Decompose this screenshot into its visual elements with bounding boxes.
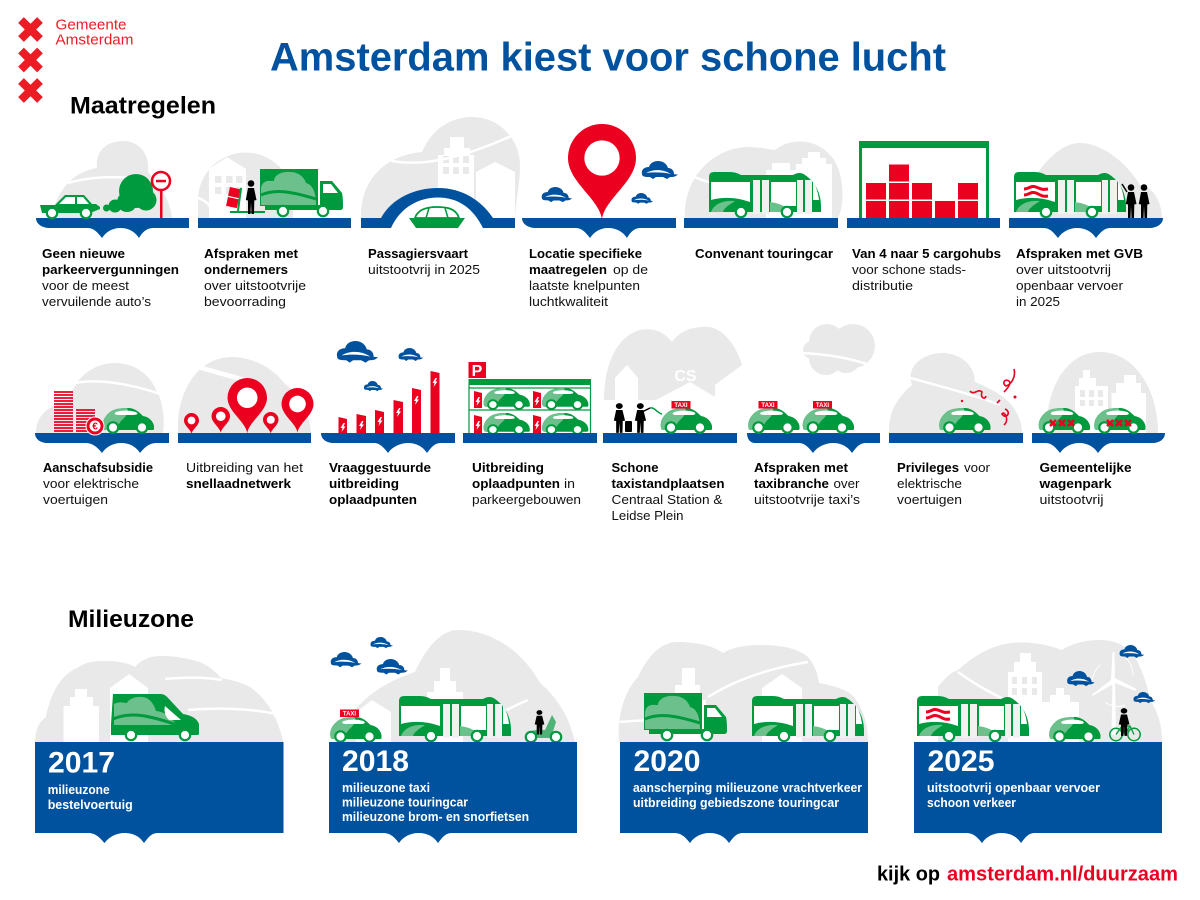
text block: voor de meest — [42, 278, 129, 293]
illustration: truck and touringcar — [619, 642, 868, 742]
illustration: stacks of coins and electric car: € — [92, 422, 98, 432]
text block: voor elektrische — [43, 476, 139, 491]
title: Amsterdam kiest voor schone lucht — [270, 36, 946, 80]
illustration: large red pin and clouds — [522, 124, 678, 238]
illustration: two municipal cars — [1032, 352, 1165, 453]
illustration: zero-emission bus, car, cyclist and wind turbine — [917, 640, 1162, 742]
blue panel with year and text: milieuzone brom- en snorfietsen — [342, 810, 529, 824]
icon: three Andreas crosses — [21, 20, 40, 100]
panel: snellaadnetwerk — [178, 357, 314, 491]
text block: Aanschafsubsidie — [43, 460, 153, 475]
illustration: stacks of coins and electric car — [35, 363, 169, 453]
panel: afspraken met GVB — [1009, 143, 1163, 309]
text block — [42, 246, 179, 309]
footer: website link: amsterdam.nl/duurzaam — [947, 864, 1178, 886]
blue panel with year and text — [329, 742, 577, 843]
text block: taxibranche — [754, 476, 829, 491]
illustration: rising charging points and clouds — [321, 341, 455, 453]
text block: over uitstootvrije — [204, 278, 306, 293]
text block: Locatie specifieke — [529, 246, 642, 261]
text block: ondernemers — [204, 262, 288, 277]
text block: Schone — [612, 460, 658, 475]
text block: Uitbreiding van het — [186, 460, 303, 475]
text block: Geen nieuwe — [42, 246, 125, 261]
blue panel with year and text: 2018 — [342, 745, 409, 778]
panel: gemeentelijke wagenpark — [1032, 352, 1165, 507]
text block: snellaadnetwerk — [186, 476, 292, 491]
text block: vervuilende auto’s — [42, 294, 152, 309]
text block: voertuigen — [897, 492, 962, 507]
text block: Afspraken met — [204, 246, 299, 261]
panel: passagiersvaart — [361, 117, 520, 277]
illustration: delivery truck and trolley — [198, 152, 351, 228]
text block — [529, 246, 648, 309]
text block — [897, 460, 991, 507]
text block: Convenant touringcar — [695, 246, 833, 261]
illustration: hub with red containers — [847, 141, 1000, 228]
text block: Privileges — [897, 460, 959, 475]
panel: cargohubs — [847, 141, 1001, 293]
text block: uitstootvrij — [1040, 492, 1104, 507]
text block: in — [564, 476, 575, 491]
text block: uitstootvrije taxi’s — [754, 492, 861, 507]
blue panel with year and text — [35, 742, 284, 843]
heading: Milieuzone: Milieuzone — [68, 606, 194, 633]
text block: openbaar vervoer — [1016, 278, 1124, 293]
text block: op de — [613, 262, 648, 277]
text block — [852, 246, 1001, 293]
text block: Afspraken met GVB — [1016, 246, 1143, 261]
text block: wagenpark — [1038, 476, 1112, 491]
panel: afspraken met ondernemers — [198, 152, 351, 309]
illustration: car, exhaust and no-entry sign — [36, 141, 189, 238]
text block — [1016, 246, 1143, 309]
blue panel with year and text: bestelvoertuig — [48, 798, 133, 812]
text block: voor schone stads- — [852, 262, 966, 277]
illustration: taxi, touringcar, scooter and clouds — [330, 630, 575, 742]
text block: parkeergebouwen — [472, 492, 581, 507]
blue panel with year and text: uitstootvrij openbaar vervoer — [927, 781, 1100, 795]
text block: uitbreiding — [329, 476, 399, 491]
text block — [612, 460, 725, 523]
text block: over — [834, 476, 860, 491]
blue panel with year and text: milieuzone taxi — [342, 781, 430, 795]
illustration: boat under bridge — [361, 117, 520, 228]
text block: Centraal Station & — [612, 492, 723, 507]
panel: aanschafsubsidie — [35, 363, 169, 507]
panel: convenant touringcar — [684, 142, 843, 261]
text block — [329, 460, 431, 507]
footer: website link: kijk op — [877, 864, 940, 886]
logo wordmark: Gemeente — [56, 16, 126, 34]
blue panel with year and text: schoon verkeer — [927, 796, 1016, 810]
panel: 2025 — [914, 640, 1162, 843]
text block: laatste knelpunten — [529, 278, 640, 293]
text block — [186, 460, 303, 491]
text block: maatregelen — [529, 262, 607, 277]
illustration: five map pins — [178, 357, 314, 443]
panel: schone taxistandplaatsen — [603, 327, 742, 523]
illustration: GVB bus and passengers — [1009, 143, 1163, 238]
blue panel with year and text: 2025 — [928, 745, 994, 778]
text block: elektrische — [897, 476, 962, 491]
text block: Van 4 naar 5 cargohubs — [852, 246, 1001, 261]
logo wordmark: Amsterdam — [56, 32, 134, 49]
text block — [472, 460, 581, 507]
illustration: van in front of city — [35, 656, 284, 742]
text block: Afspraken met — [754, 460, 849, 475]
text block: voertuigen — [43, 492, 108, 507]
blue panel with year and text: aanscherping milieuzone vrachtverkeer — [633, 781, 862, 795]
heading: Maatregelen: Maatregelen — [70, 92, 216, 120]
blue panel with year and text: milieuzone — [48, 783, 110, 797]
logo wordmark — [56, 16, 134, 49]
text block — [204, 246, 306, 309]
text block: voor — [964, 460, 991, 475]
text block: Vraaggestuurde — [329, 460, 431, 475]
text block: bevoorrading — [204, 294, 286, 309]
panel: 2017 — [35, 656, 284, 843]
panel: afspraken met taxibranche — [747, 324, 880, 507]
illustration: Centraal Station taxi stand: CS — [674, 368, 697, 385]
illustration: two taxis and grey cloud — [747, 324, 880, 453]
illustration: parking garage with charging cars: P — [472, 363, 483, 380]
blue panel with year and text: uitbreiding gebiedszone touringcar — [633, 796, 839, 810]
blue panel with year and text — [914, 742, 1162, 843]
text block: Uitbreiding — [472, 460, 544, 475]
blue panel with year and text — [620, 742, 868, 843]
text block: oplaadpunten — [472, 476, 560, 491]
panel: vraaggestuurde uitbreiding oplaadpunten — [321, 341, 455, 507]
illustration: touringcar — [684, 142, 843, 228]
panel: 2018 — [329, 630, 577, 843]
text block — [754, 460, 861, 507]
text block: parkeervergunningen — [42, 262, 179, 277]
text block: uitstootvrij in 2025 — [368, 262, 480, 277]
blue panel with year and text: milieuzone touringcar — [342, 796, 468, 810]
text block: Gemeentelijke — [1040, 460, 1132, 475]
text block: oplaadpunten — [329, 492, 417, 507]
panel: geen nieuwe parkeervergunningen — [36, 141, 189, 309]
text block: luchtkwaliteit — [529, 294, 608, 309]
panel: locatie specifieke maatregelen — [522, 124, 678, 309]
text block: taxistandplaatsen — [612, 476, 725, 491]
blue panel with year and text: 2020 — [634, 745, 700, 778]
illustration: car with confetti — [889, 353, 1023, 443]
blue panel with year and text: 2017 — [48, 746, 115, 780]
text block: Leidse Plein — [612, 508, 684, 523]
text block — [368, 246, 480, 277]
logo: Gemeente Amsterdam — [21, 16, 134, 100]
illustration: parking garage with charging cars — [463, 362, 597, 443]
panel: privileges — [889, 353, 1023, 507]
panel: 2020 — [619, 642, 868, 843]
panel: oplaadpunten in parkeergebouwen — [463, 362, 597, 507]
text block: over uitstootvrij — [1016, 262, 1111, 277]
text block — [43, 460, 153, 507]
text block: distributie — [852, 278, 913, 293]
illustration: Centraal Station taxi stand — [603, 327, 742, 443]
text block: in 2025 — [1016, 294, 1060, 309]
text block: Passagiersvaart — [368, 246, 469, 261]
text block — [1038, 460, 1132, 507]
